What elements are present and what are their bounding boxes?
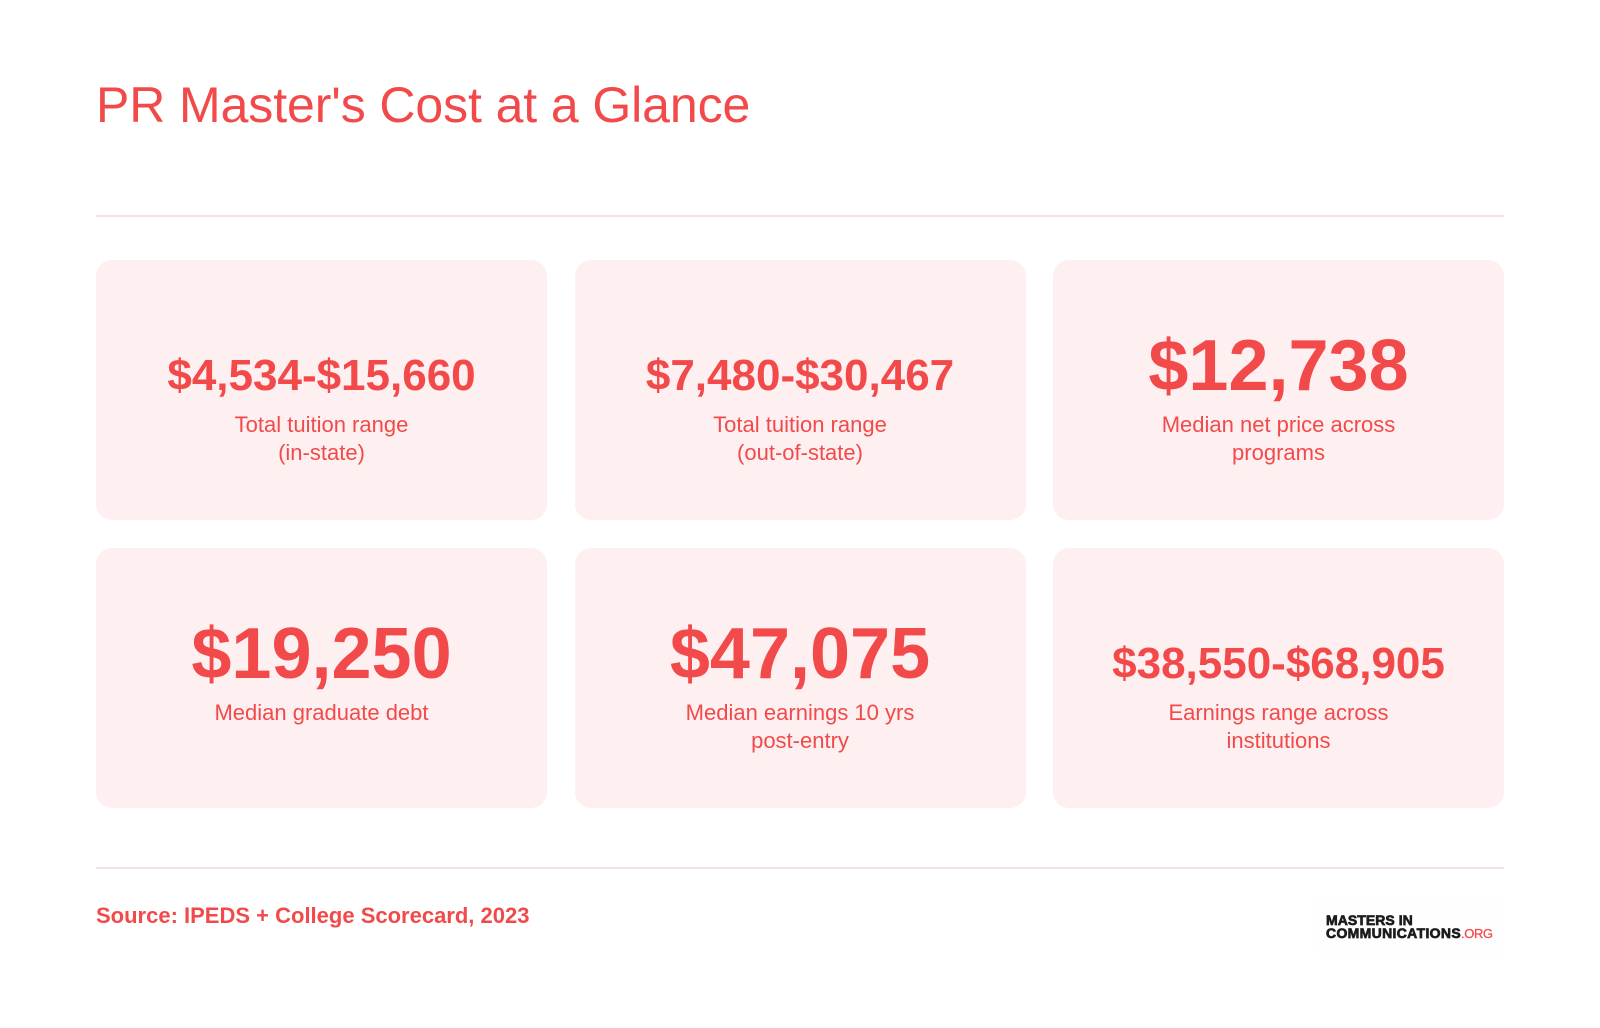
- title: PR Master's Cost at a Glance: [96, 77, 750, 133]
- stat value: $47,075: [670, 614, 930, 694]
- panel: out-of-state tuition range: [574, 260, 1026, 520]
- stat label: [1162, 412, 1395, 465]
- stat label: Earnings range across: [1168, 700, 1389, 725]
- stat value: $4,534-$15,660: [167, 351, 476, 400]
- stat value: $38,550-$68,905: [1112, 639, 1445, 688]
- stat label: Median graduate debt: [214, 700, 429, 725]
- stat label: [1168, 700, 1389, 753]
- panel: median graduate debt: [96, 548, 547, 808]
- stat value: $19,250: [191, 614, 452, 694]
- stat label: programs: [1232, 440, 1325, 465]
- source note: Source: IPEDS + College Scorecard, 2023: [96, 903, 529, 928]
- stat value: $12,738: [1148, 326, 1409, 406]
- stat label: Median earnings 10 yrs: [686, 700, 914, 725]
- stat label: Median net price across: [1162, 412, 1395, 437]
- logo: [1314, 896, 1504, 954]
- stat label: institutions: [1227, 728, 1330, 753]
- stat label: [686, 700, 914, 753]
- stat label: (in-state): [278, 440, 365, 465]
- stat value: $7,480-$30,467: [646, 351, 954, 400]
- stat label: [713, 412, 887, 465]
- stat label: [235, 412, 408, 465]
- logo line 1: MASTERS IN: [1326, 912, 1413, 928]
- panel: in-state tuition range: [96, 260, 547, 520]
- logo line 2: COMMUNICATIONS.ORG: [1326, 925, 1493, 941]
- panel: median net price: [1053, 260, 1504, 520]
- stat label: (out-of-state): [737, 440, 863, 465]
- stat label: Total tuition range: [713, 412, 887, 437]
- panel: earnings range: [1053, 548, 1504, 808]
- stat label: Total tuition range: [235, 412, 408, 437]
- stat label: post-entry: [751, 728, 849, 753]
- panel: median earnings: [574, 548, 1026, 808]
